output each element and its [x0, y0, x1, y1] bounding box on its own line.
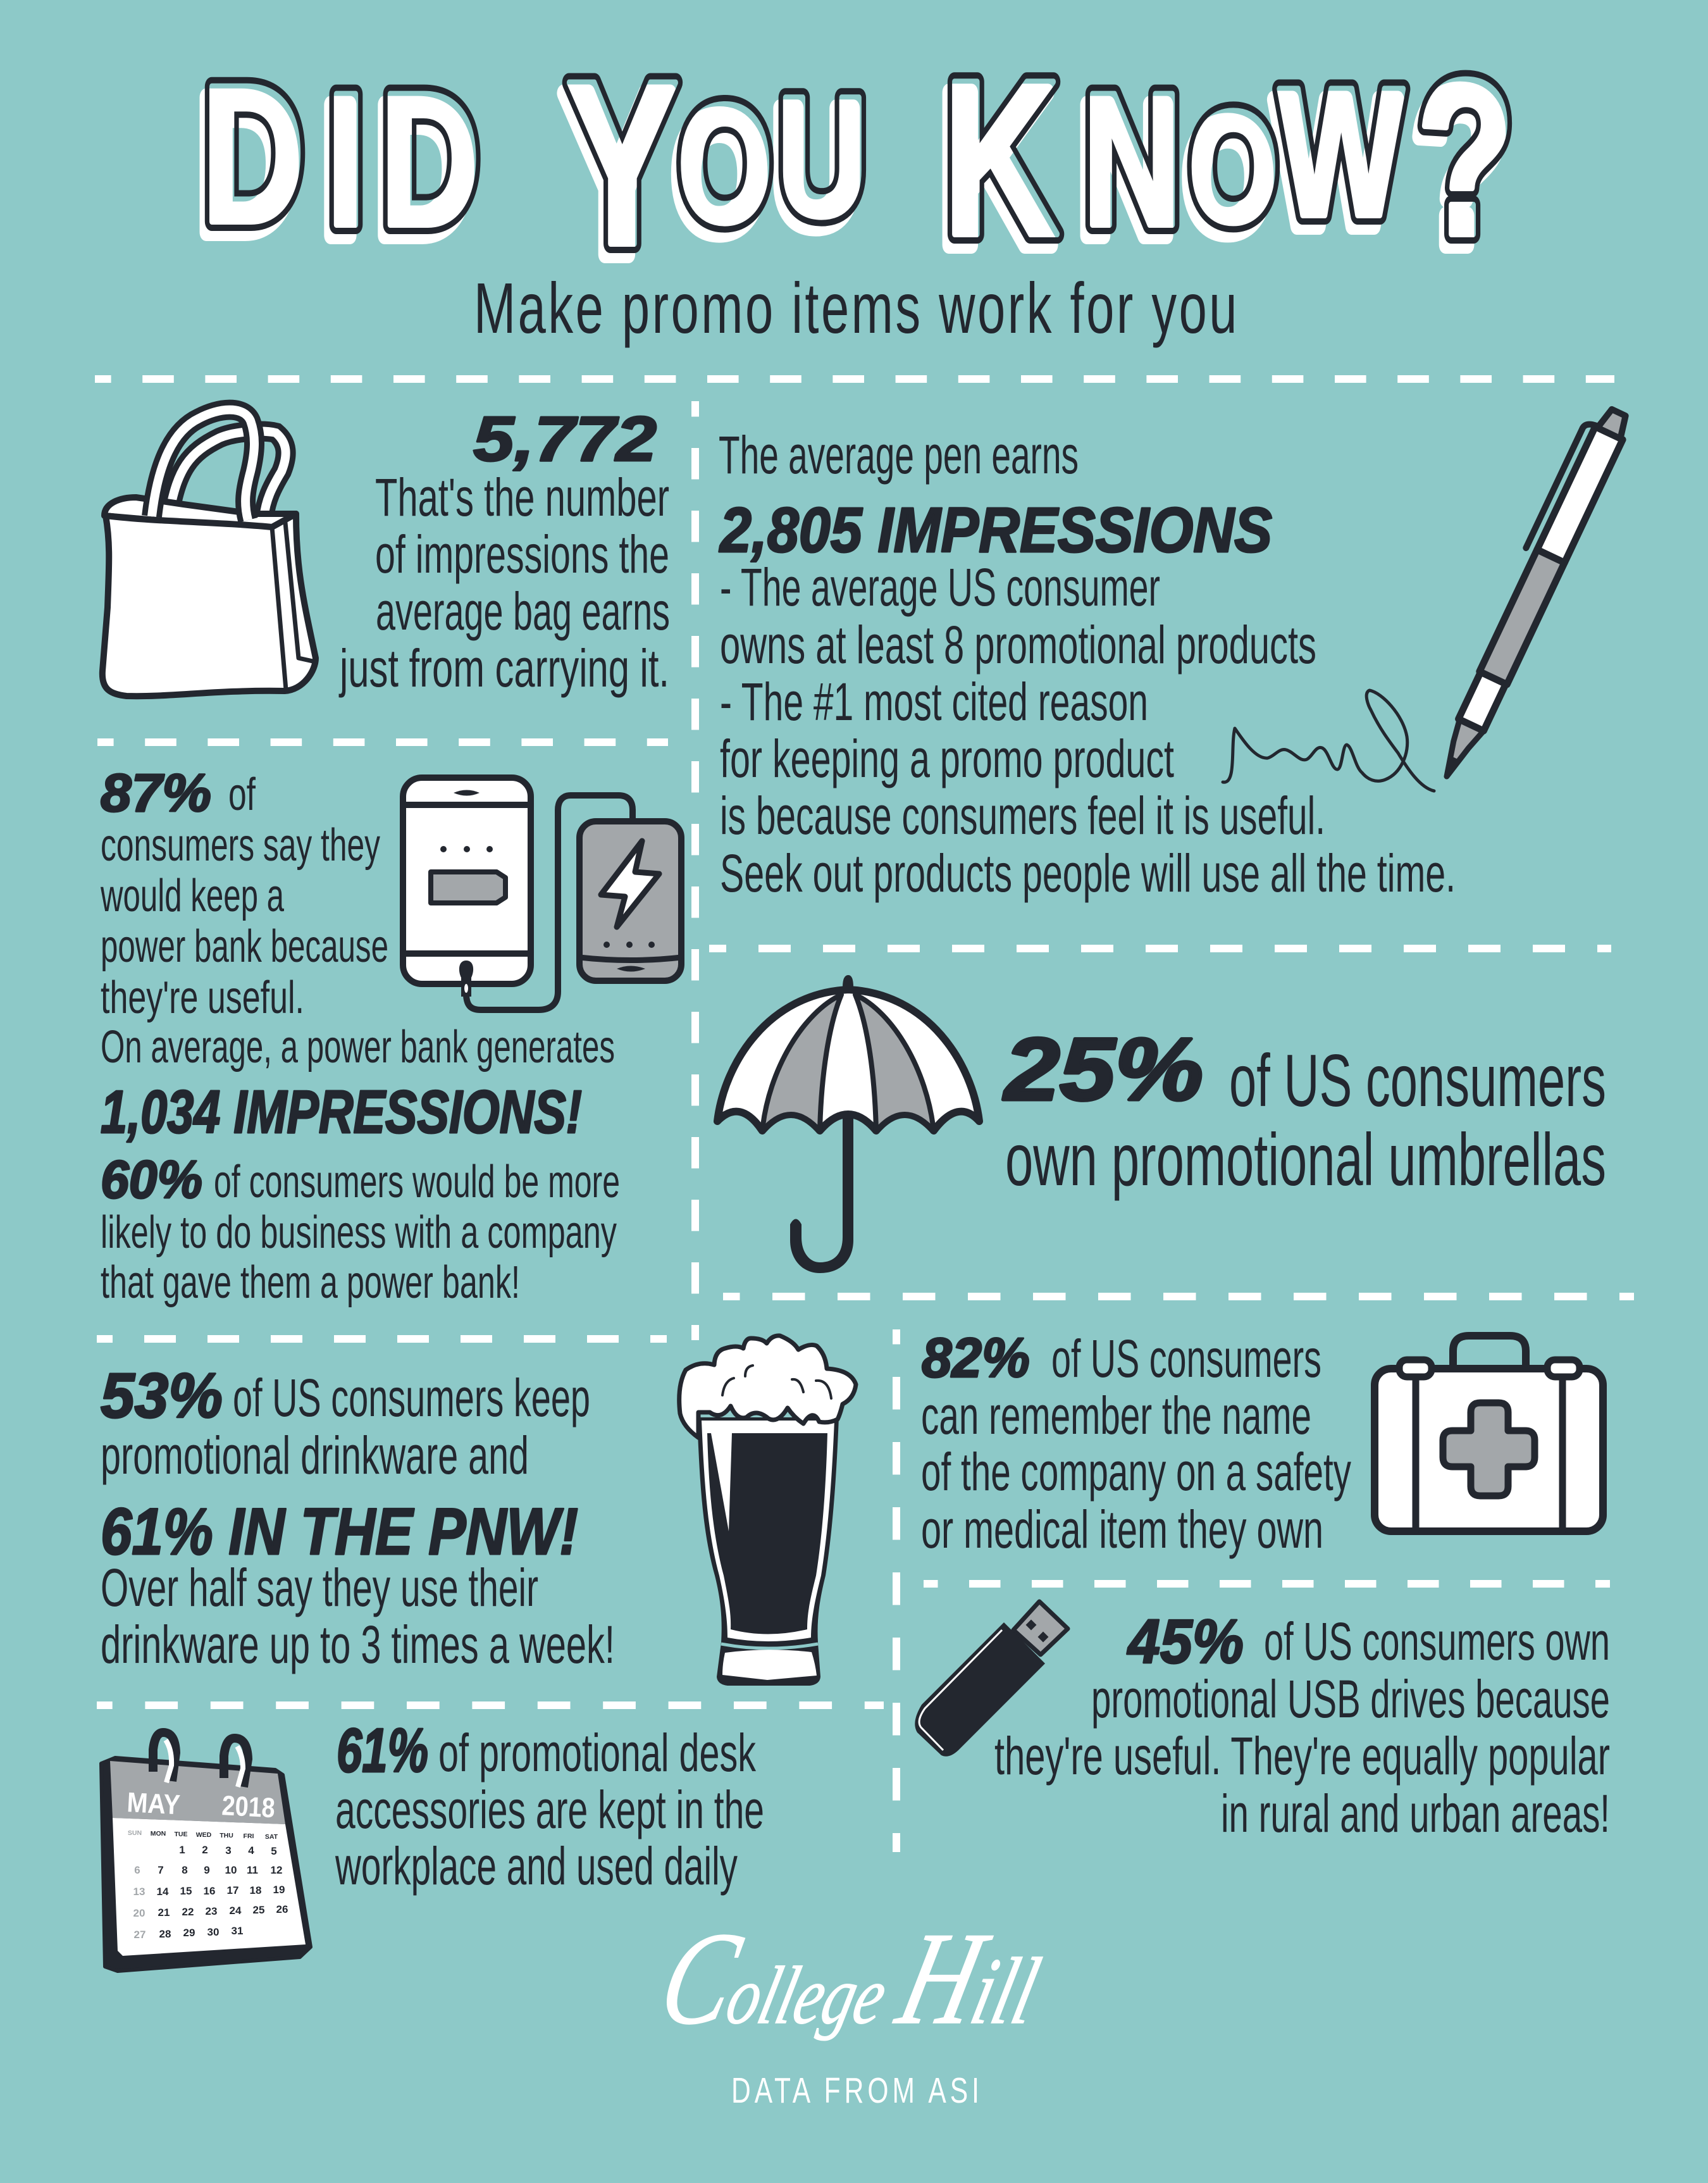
icon: calendar: 6 [134, 1864, 140, 1876]
icon: first aid kit [1375, 1336, 1603, 1531]
icon: calendar: 31 [232, 1925, 243, 1937]
panel: power bank [100, 763, 681, 1308]
text: bag description: That's the number [375, 468, 669, 527]
panel: medical kit [921, 1326, 1603, 1559]
icon: USB drive [915, 1601, 1068, 1757]
stat: 61% in the PNW: 61% IN THE PNW! [101, 1495, 578, 1569]
icon: calendar: 8 [182, 1864, 188, 1876]
icon: calendar: 26 [276, 1903, 288, 1915]
icon: beer glass [679, 1336, 856, 1686]
icon: calendar: 9 [204, 1864, 210, 1876]
text: 60% description: that gave them a power bank! [101, 1257, 520, 1308]
text: medical description [921, 1329, 1351, 1559]
panel: umbrella [717, 975, 1606, 1273]
stat: 60%: 60% [101, 1150, 202, 1209]
stat: 2,805 impressions: 2,805 IMPRESSIONS [719, 495, 1272, 566]
icon: calendar: MAY [126, 1787, 181, 1820]
icon: calendar: 21 [158, 1906, 170, 1919]
title: ? [1417, 34, 1514, 282]
title: K [944, 34, 1059, 282]
icon: phone and power bank [403, 778, 681, 1010]
title: D [381, 53, 517, 265]
text: medical description: of US consumers [1051, 1329, 1321, 1388]
icon: calendar: 28 [159, 1928, 171, 1940]
text: drinkware usage [101, 1558, 615, 1674]
title: W [1273, 59, 1398, 265]
title: W [1279, 49, 1404, 254]
icon: calendar: 12 [271, 1864, 282, 1876]
title: Y [560, 43, 673, 304]
title [200, 70, 1512, 263]
text: power bank description: they're useful. [101, 973, 304, 1023]
icon: calendar [101, 1732, 311, 1971]
text: medical description: can remember the name [921, 1386, 1311, 1445]
source line: DATA FROM ASI [731, 2070, 983, 2111]
stat: 1,034 impressions: 1,034 IMPRESSIONS! [101, 1078, 582, 1146]
icon: tote bag [102, 410, 316, 696]
title: U [772, 72, 895, 262]
icon: calendar: 20 [133, 1907, 145, 1919]
text: drinkware lead [101, 1368, 590, 1485]
icon: calendar: FRI [244, 1832, 254, 1840]
icon: calendar: 13 [133, 1886, 145, 1898]
text: power bank description: On average, a power bank generates [101, 1022, 615, 1073]
icon: calendar: 24 [230, 1905, 242, 1917]
text: power bank description: would keep a [100, 871, 285, 921]
title: K [938, 44, 1053, 292]
text: desk accessories description: workplace and used daily [335, 1836, 738, 1896]
text: pen description [720, 557, 1456, 903]
subtitle: Make promo items work for you [474, 268, 1239, 348]
icon: calendar: 2 [202, 1844, 208, 1856]
icon: calendar: 7 [158, 1864, 164, 1876]
text: umbrella description [1005, 1039, 1606, 1201]
text: pen description: owns at least 8 promotional products [720, 615, 1316, 675]
text: desk accessories description: accessories are kept in the [335, 1780, 764, 1839]
icon: calendar: 11 [247, 1864, 258, 1876]
stat: 61%: 61% [337, 1715, 428, 1785]
icon: calendar: 23 [206, 1905, 217, 1917]
text: pen description: - The #1 most cited reason [720, 672, 1148, 731]
panel: drinkware [101, 1336, 856, 1686]
text: bag description: just from carrying it. [338, 638, 669, 698]
icon: calendar: 14 [157, 1886, 169, 1898]
text: 60% description: of consumers would be more [214, 1157, 620, 1207]
icon: calendar: THU [220, 1832, 233, 1839]
logo: College Hill: College Hill [647, 1905, 1057, 2052]
panel: USB [915, 1601, 1610, 1843]
icon: calendar: 19 [273, 1884, 285, 1896]
icon: calendar: 3 [225, 1844, 232, 1856]
text: pen description: for keeping a promo product [720, 729, 1174, 788]
text: medical description: of the company on a safety [921, 1442, 1351, 1502]
icon: calendar: MON [151, 1830, 166, 1838]
icon: calendar: 10 [225, 1864, 237, 1876]
icon: calendar: SAT [265, 1833, 278, 1841]
text: bag description [338, 468, 670, 698]
text: 60% description [101, 1157, 620, 1308]
title: I [321, 64, 359, 276]
icon: calendar: 25 [253, 1904, 264, 1916]
icon: signature [1223, 690, 1434, 791]
stat: 53%: 53% [101, 1360, 223, 1431]
panel: pen [719, 401, 1632, 903]
text: desk accessories description [335, 1723, 764, 1896]
stat: 82%: 82% [922, 1326, 1030, 1389]
icon: calendar: 1 [179, 1844, 185, 1856]
text: pen description: - The average US consumer [720, 557, 1160, 617]
title: D [202, 44, 304, 264]
title: D [197, 55, 299, 275]
text: bag description: average bag earns [376, 582, 670, 641]
text: medical description: or medical item they own [921, 1500, 1323, 1559]
text: drinkware usage: drinkware up to 3 times a week! [101, 1615, 615, 1674]
text: desk accessories description: of promotional desk [438, 1723, 757, 1782]
icon: calendar: 16 [204, 1885, 215, 1897]
text: power bank description: of [228, 769, 256, 820]
icon: calendar: 30 [207, 1926, 219, 1938]
stat: 5,772: 5,772 [473, 404, 657, 475]
title: U [778, 61, 901, 251]
stat: 25%: 25% [1003, 1019, 1203, 1119]
title: O [678, 70, 772, 257]
panel: bag [102, 404, 670, 698]
icon: calendar: 27 [134, 1929, 145, 1941]
text: power bank description: power bank because [101, 921, 388, 972]
text: drinkware lead: of US consumers keep [233, 1368, 590, 1427]
title: O [1184, 90, 1272, 266]
title: ? [1411, 44, 1509, 292]
text: drinkware lead: promotional drinkware and [101, 1426, 529, 1485]
text: 60% description: likely to do business with a company [101, 1207, 617, 1258]
icon: calendar: 2018 [221, 1790, 276, 1824]
title: D [375, 64, 512, 276]
stat: 87%: 87% [101, 763, 211, 823]
title: O [1189, 79, 1278, 256]
title: Y [566, 32, 679, 294]
icon: pen [1423, 401, 1632, 783]
stat: 45%: 45% [1127, 1607, 1244, 1676]
text: pen description: is because consumers feel it is useful. [720, 786, 1325, 845]
panel: desk accessories [101, 1715, 764, 1971]
icon: calendar: 22 [182, 1906, 194, 1918]
title: N [1077, 64, 1176, 276]
icon: calendar: 18 [250, 1884, 261, 1896]
text: power bank description: consumers say they [101, 820, 380, 871]
icon: calendar: 5 [271, 1845, 277, 1857]
text: USB description [994, 1612, 1610, 1843]
icon: calendar: TUE [175, 1831, 187, 1838]
text: bag description: of impressions the [375, 525, 669, 584]
icon: calendar: SUN [128, 1829, 142, 1837]
title: O [672, 80, 766, 268]
icon: calendar: 29 [183, 1927, 195, 1939]
icon: umbrella [717, 975, 979, 1273]
title: I [327, 53, 365, 265]
icon: calendar: 15 [180, 1885, 192, 1897]
icon: calendar: WED [196, 1831, 212, 1839]
icon: calendar: 4 [248, 1844, 254, 1856]
title: N [1083, 53, 1182, 265]
text: drinkware usage: Over half say they use their [101, 1558, 538, 1617]
icon: calendar: 17 [227, 1884, 238, 1896]
text: pen intro: The average pen earns [719, 425, 1079, 485]
text: power bank description [100, 769, 615, 1073]
